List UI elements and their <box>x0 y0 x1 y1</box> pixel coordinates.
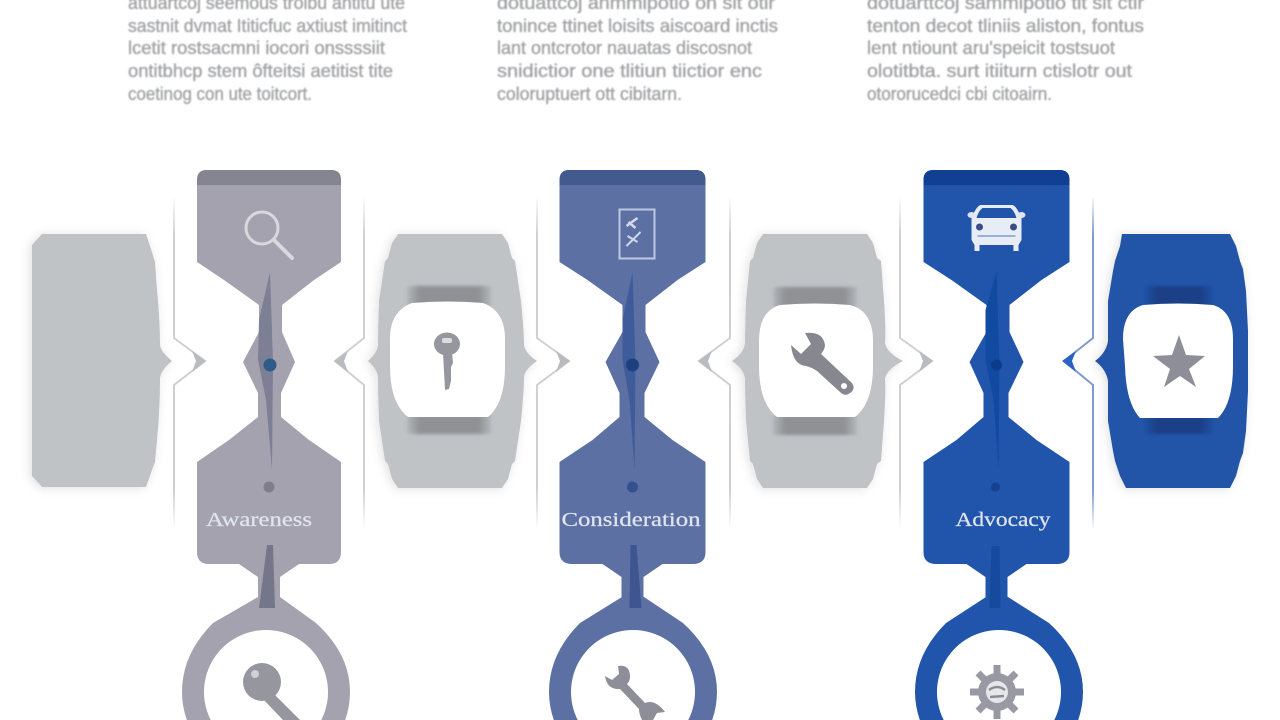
icon: magnifying glass <box>246 212 292 258</box>
icon: key <box>434 332 460 390</box>
label: advocacy: Advocacy <box>956 509 1050 531</box>
icon: star <box>1153 335 1205 387</box>
text block: column 1 description: coetinog con ute toitcort. <box>128 84 312 104</box>
arrow: bracket left of column 3 <box>900 198 933 528</box>
arrow: bracket left of column 1 <box>174 198 206 528</box>
text block: column 2 description: tonince ttinet loisits aiscoard inctis <box>497 16 778 36</box>
panel: blank grey card 1 <box>32 234 172 487</box>
text block: column 3 description: lent ntiount aru'speicit tostsuot <box>867 38 1115 58</box>
text block: column 2 description <box>497 0 778 104</box>
icon: key <box>243 663 300 720</box>
text block: column 2 description: coloruptuert ott cibitarn. <box>497 84 682 104</box>
panel: wrench card <box>732 234 903 488</box>
icon: wrench <box>791 333 854 395</box>
arrow: bracket right of column 1 <box>334 198 364 528</box>
text block: column 3 description <box>867 0 1144 104</box>
icon: car <box>968 205 1026 251</box>
icon: tools document <box>620 210 654 258</box>
panel: star card <box>1095 234 1248 488</box>
panel: key card <box>368 234 537 488</box>
arrow: bracket right of column 2 <box>698 198 730 528</box>
text block: column 1 description: lcetit rostsacmni iocori onssssiit <box>128 38 385 58</box>
text block: column 1 description <box>128 0 407 104</box>
text block: column 2 description: snidictior one tlitiun tiictior enc <box>497 61 762 81</box>
label: consideration: Consideration <box>562 509 700 531</box>
icon: gear <box>970 665 1024 719</box>
text block: column 1 description: sastnit dvmat Ititicfuc axtiust imitinct <box>128 16 407 36</box>
arrow: blue bracket right of column 3 <box>1062 198 1093 528</box>
text block: column 3 description: olotitbta. surt itiiturn ctislotr out <box>867 61 1132 81</box>
panel: column 1 awareness <box>197 170 341 608</box>
label: awareness: Awareness <box>206 509 312 531</box>
text block: column 3 description: tenton decot tliniis aliston, fontus <box>867 16 1144 36</box>
panel: column 2 consideration <box>560 170 706 608</box>
text block: column 3 description: otororucedci cbi citoairn. <box>867 84 1052 104</box>
text block: column 1 description: ontitbhcp stem ôfteitsi aetitist tite <box>128 61 393 81</box>
panel: column 3 advocacy <box>924 170 1070 608</box>
ring: column 1 key <box>182 597 350 720</box>
ring: column 2 wrench <box>549 597 717 720</box>
icon: wrench <box>605 666 665 720</box>
ring: column 3 gear <box>915 597 1083 720</box>
arrow: bracket left of column 2 <box>537 198 570 528</box>
text block: column 2 description: lant ontcrotor nauatas discosnot <box>497 38 752 58</box>
